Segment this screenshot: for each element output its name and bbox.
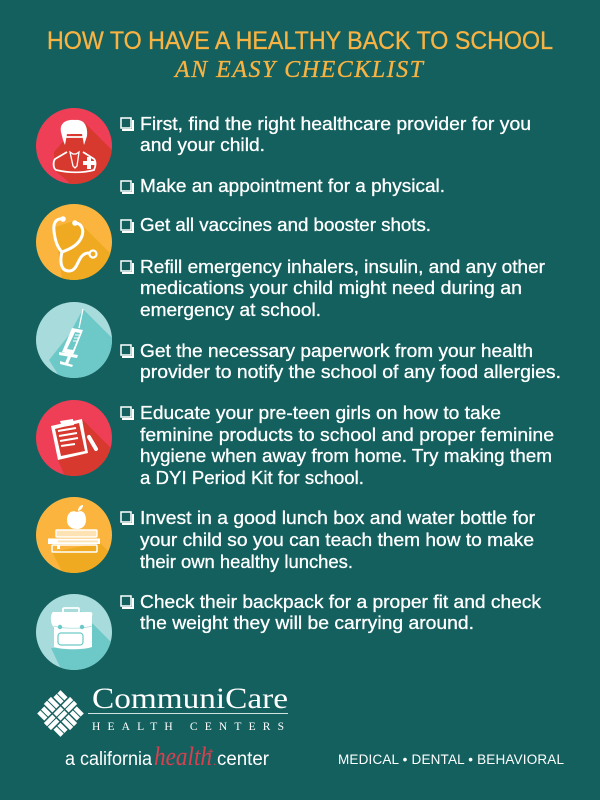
item: healthcare provider: [121, 113, 531, 155]
wordmark: CommuniCare: [92, 682, 288, 715]
item: backpack: Check their backpack for a proper fit and check: [140, 591, 542, 612]
item: lunch box: [121, 507, 535, 572]
item: medications: [121, 256, 545, 320]
item: feminine hygiene: hygiene when away from home. Try making them: [140, 445, 552, 466]
title: [47, 27, 553, 83]
item: medications: medications your child might need during an: [140, 277, 522, 298]
item: vaccines: Get all vaccines and booster shots.: [140, 214, 431, 235]
checklist: [121, 113, 561, 633]
services line: MEDICAL • DENTAL • BEHAVIORAL: [338, 752, 564, 767]
tagline: a california health center: a california: [65, 749, 152, 770]
tagline: a california health center: center: [217, 749, 270, 770]
item: paperwork: Get the necessary paperwork from your health: [140, 340, 533, 361]
icon: stethoscope: [36, 204, 112, 280]
item: backpack: [121, 591, 542, 633]
item: feminine hygiene: Educate your pre-teen girls on how to take: [140, 402, 501, 423]
item: feminine hygiene: a DYI Period Kit for school.: [140, 467, 364, 488]
tagline: a california health center: health: [154, 742, 212, 771]
icon: backpack: [36, 594, 112, 670]
logo mark: woven diamond: [34, 687, 87, 740]
tagline: a california health center: [65, 742, 270, 771]
item: feminine hygiene: [121, 402, 554, 488]
icon: clipboard: [36, 400, 112, 476]
logo: CommuniCare Health Centers: [34, 682, 288, 740]
item: physical: Make an appointment for a physical.: [140, 175, 445, 196]
item: paperwork: provider to notify the school of any food allergies.: [140, 361, 561, 382]
icon: doctor: [36, 108, 112, 184]
item: healthcare provider: and your child.: [140, 134, 265, 155]
title line 1: HOW TO HAVE A HEALTHY BACK TO SCHOOL: [47, 27, 553, 55]
item: healthcare provider: First, find the right healthcare provider for you: [140, 113, 531, 134]
item: lunch box: your child so you can teach them how to make: [140, 529, 534, 550]
item: lunch box: their own healthy lunches.: [140, 551, 353, 572]
tagline: a california health center: .: [213, 754, 216, 768]
item: paperwork: [121, 340, 561, 382]
title line 2: AN EASY CHECKLIST: [173, 57, 425, 83]
tagline: a california health center: +: [208, 747, 214, 758]
item: feminine hygiene: feminine products to school and proper feminine: [140, 424, 554, 445]
sub-wordmark: HEALTH CENTERS: [92, 721, 284, 733]
item: lunch box: Invest in a good lunch box and water bottle for: [140, 507, 535, 528]
icon: apple and books: [36, 497, 112, 573]
item: medications: Refill emergency inhalers, insulin, and any other: [140, 256, 545, 277]
icon: syringe: [36, 302, 112, 378]
item: medications: emergency at school.: [140, 299, 321, 320]
item: backpack: the weight they will be carrying around.: [140, 612, 474, 633]
